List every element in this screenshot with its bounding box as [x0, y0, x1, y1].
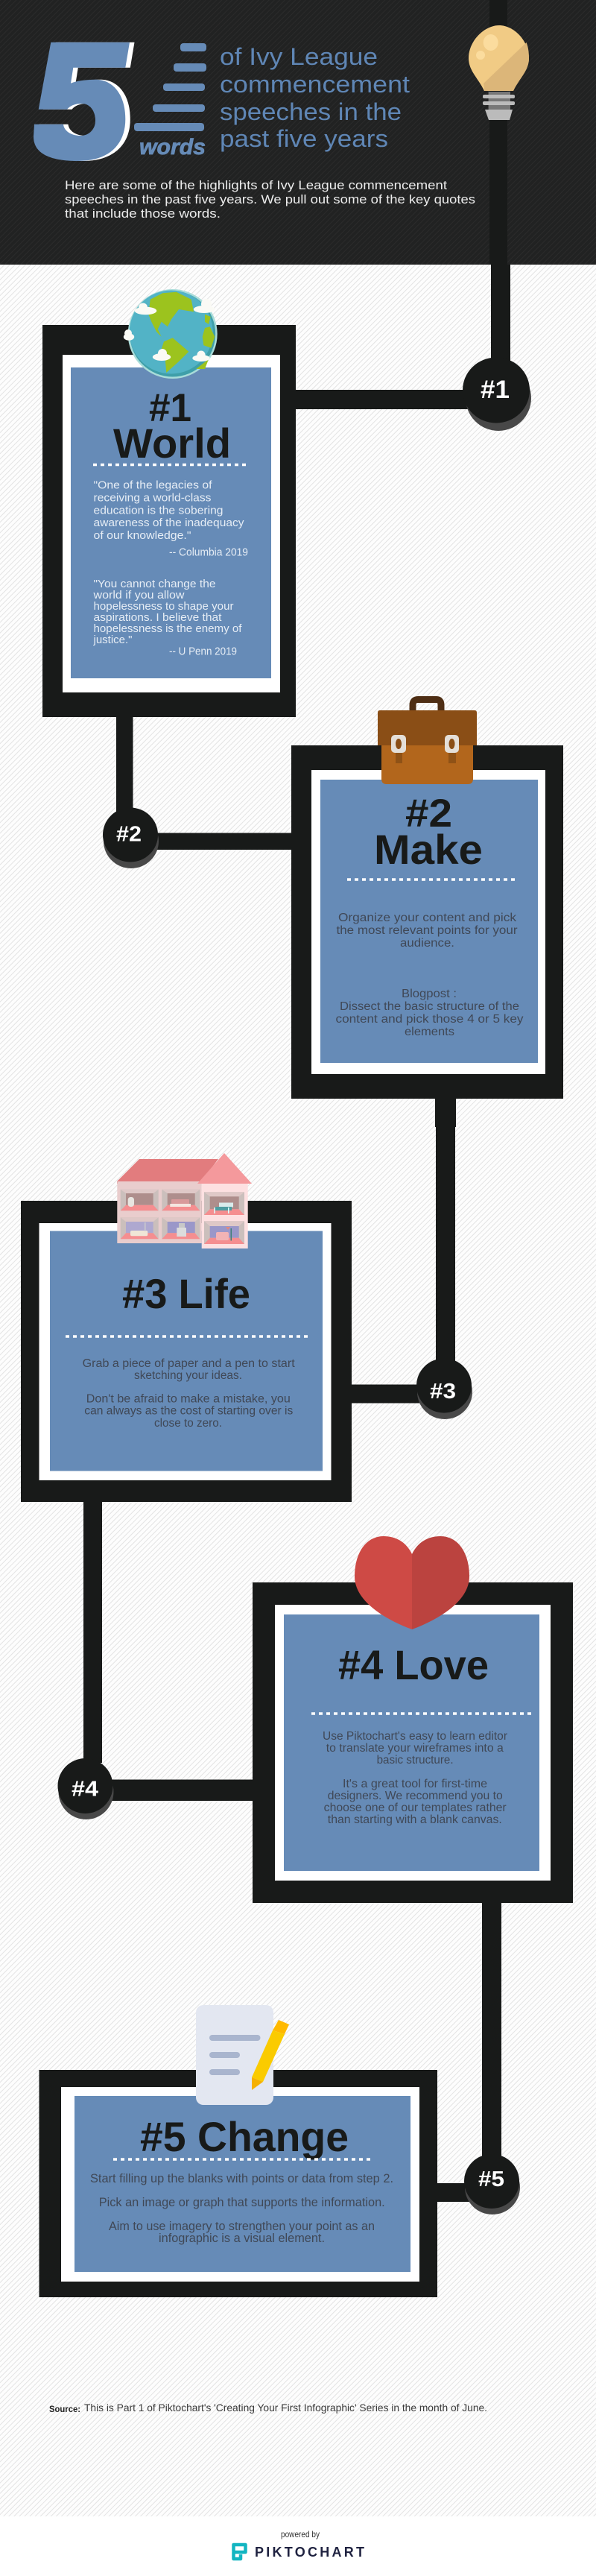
heading: #1 World: World: [113, 420, 231, 467]
quote: U Penn: [92, 578, 242, 658]
heading: #5 Change: #5 Change: [140, 2113, 349, 2160]
footer: powered by Piktochart: PIKTOCHART: [255, 2545, 364, 2560]
title: of Ivy League: [220, 43, 378, 70]
badge: #4: [58, 1758, 113, 1819]
body text: blogpost: elements: [405, 1026, 454, 1038]
body text: organize: audience.: [400, 937, 454, 950]
body text: sketching: Grab a piece of paper and a pen to start: [83, 1357, 295, 1370]
body text: sketching: sketching your ideas.: [134, 1369, 242, 1382]
quote: U Penn: "You cannot change the: [94, 578, 216, 590]
speed bars: [134, 43, 206, 131]
heading: #2 Make: Make: [374, 826, 483, 873]
panel: #1 World: [42, 289, 296, 717]
quote: Columbia: education is the sobering: [94, 504, 224, 517]
heading: #4 Love: #4 Love: [338, 1641, 489, 1688]
intro text: Here are some of the highlights of Ivy League commencement: [65, 178, 447, 192]
icon: heart: [355, 1536, 469, 1629]
panel: #2 Make: [291, 699, 563, 1099]
title: speeches in the: [220, 98, 402, 125]
badge: #5: #5: [478, 2168, 504, 2191]
badge: #2: [103, 808, 159, 868]
body text: sketching: can always as the cost of starting over is: [84, 1405, 294, 1418]
icon: house: [117, 1153, 252, 1248]
body text: sketching: close to zero.: [154, 1417, 222, 1430]
quote: U Penn: aspirations. I believe that: [94, 611, 222, 624]
body text: fill blanks: infographic is a visual element.: [159, 2231, 325, 2245]
connector: step 3 to step 4: [83, 1502, 253, 1801]
body text: blogpost: Dissect the basic structure of the: [340, 1000, 519, 1013]
icon: note and pencil: [196, 2005, 289, 2105]
badge: #1: [463, 358, 531, 431]
body text: editor: [323, 1730, 507, 1826]
badge: #5: [464, 2154, 520, 2214]
panel: #5 Change: [39, 2005, 437, 2297]
quote: Columbia: "One of the legacies of: [94, 479, 212, 492]
body text: fill blanks: Aim to use imagery to strengthen your point as an: [109, 2219, 375, 2233]
intro text: that include those words.: [65, 206, 221, 221]
quote: Columbia: -- Columbia 2019: [169, 546, 248, 559]
icon: globe: [124, 289, 218, 379]
connector: header to step 1: [296, 265, 510, 409]
quote: U Penn: justice.": [93, 634, 133, 646]
body text: organize: [337, 912, 517, 950]
body text: blogpost: Blogpost :: [402, 988, 457, 1000]
icon: Piktochart logo: [234, 2545, 246, 2559]
body text: editor: It's a great tool for first-time: [343, 1778, 487, 1790]
source note: Source:: [49, 2404, 80, 2414]
heading: #2 Make: [374, 792, 483, 873]
body text: editor: to translate your wireframes into a: [326, 1742, 504, 1755]
heading: #1 World: [113, 386, 231, 467]
heading: #2 Make: #2: [405, 792, 452, 836]
connector: step 2 to step 3: [352, 1099, 456, 1403]
connector: step 4 to step 5: [437, 1903, 501, 2202]
quote: Columbia: of our knowledge.": [94, 529, 191, 542]
badge: #4: #4: [72, 1777, 98, 1801]
heading: #3 Life: #3 Life: [122, 1270, 250, 1317]
quote: U Penn: hopelessness is the enemy of: [94, 622, 242, 635]
quote: Columbia: receiving a world-class: [94, 492, 212, 504]
body text: editor: than starting with a blank canvas.: [328, 1813, 502, 1826]
body text: blogpost: [335, 988, 524, 1038]
words label: words: [139, 135, 206, 160]
body text: editor: Use Piktochart's easy to learn editor: [323, 1730, 507, 1743]
quote: Columbia: awareness of the inadequacy: [94, 517, 244, 529]
quote: U Penn: world if you allow: [92, 589, 185, 602]
intro text: [65, 178, 475, 221]
body text: organize: Organize your content and pick: [338, 912, 516, 924]
title: [220, 43, 410, 152]
body text: blogpost: content and pick those 4 or 5 key: [335, 1013, 524, 1026]
footer: powered by Piktochart: [234, 2529, 364, 2560]
body text: fill blanks: Pick an image or graph that supports the information.: [99, 2195, 385, 2209]
quote: U Penn: -- U Penn 2019: [169, 645, 237, 658]
body text: editor: designers. We recommend you to: [328, 1790, 503, 1802]
source note: This is Part 1 of Piktochart's 'Creating Your First Infographic' Series in the month of June.: [84, 2402, 487, 2414]
rooms: side walls: [121, 1190, 244, 1244]
icon: light bulb: [469, 25, 529, 120]
intro text: speeches in the past five years. We pull out some of the key quotes: [65, 192, 475, 206]
body text: fill blanks: [90, 2171, 393, 2245]
title: commencement: [220, 71, 410, 98]
connector: step 1 to step 2: [116, 717, 291, 850]
quote: U Penn: hopelessness to shape your: [94, 600, 234, 613]
body text: organize: the most relevant points for your: [337, 924, 517, 937]
body text: editor: choose one of our templates rather: [324, 1802, 507, 1814]
body text: sketching: [83, 1357, 295, 1430]
panel: #4 Love: [253, 1536, 573, 1903]
quote: Columbia: [94, 479, 248, 559]
icon: briefcase: [378, 699, 477, 784]
body text: editor: basic structure.: [377, 1754, 454, 1767]
panel: #3 Life: [21, 1153, 352, 1502]
badge: #1: #1: [481, 376, 510, 404]
title: past five years: [220, 125, 388, 152]
body text: sketching: Don't be afraid to make a mistake, you: [86, 1393, 291, 1406]
badge: #3: #3: [430, 1380, 456, 1404]
footer: powered by Piktochart: powered by: [281, 2529, 320, 2539]
body text: fill blanks: Start filling up the blanks with points or data from step 2.: [90, 2171, 393, 2185]
heading: #1 World: #1: [149, 386, 191, 430]
header banner: [0, 0, 596, 265]
badge: #3: [416, 1358, 472, 1419]
big number 5: [34, 42, 134, 161]
badge: #2: #2: [116, 823, 142, 847]
furniture: [128, 1197, 233, 1240]
